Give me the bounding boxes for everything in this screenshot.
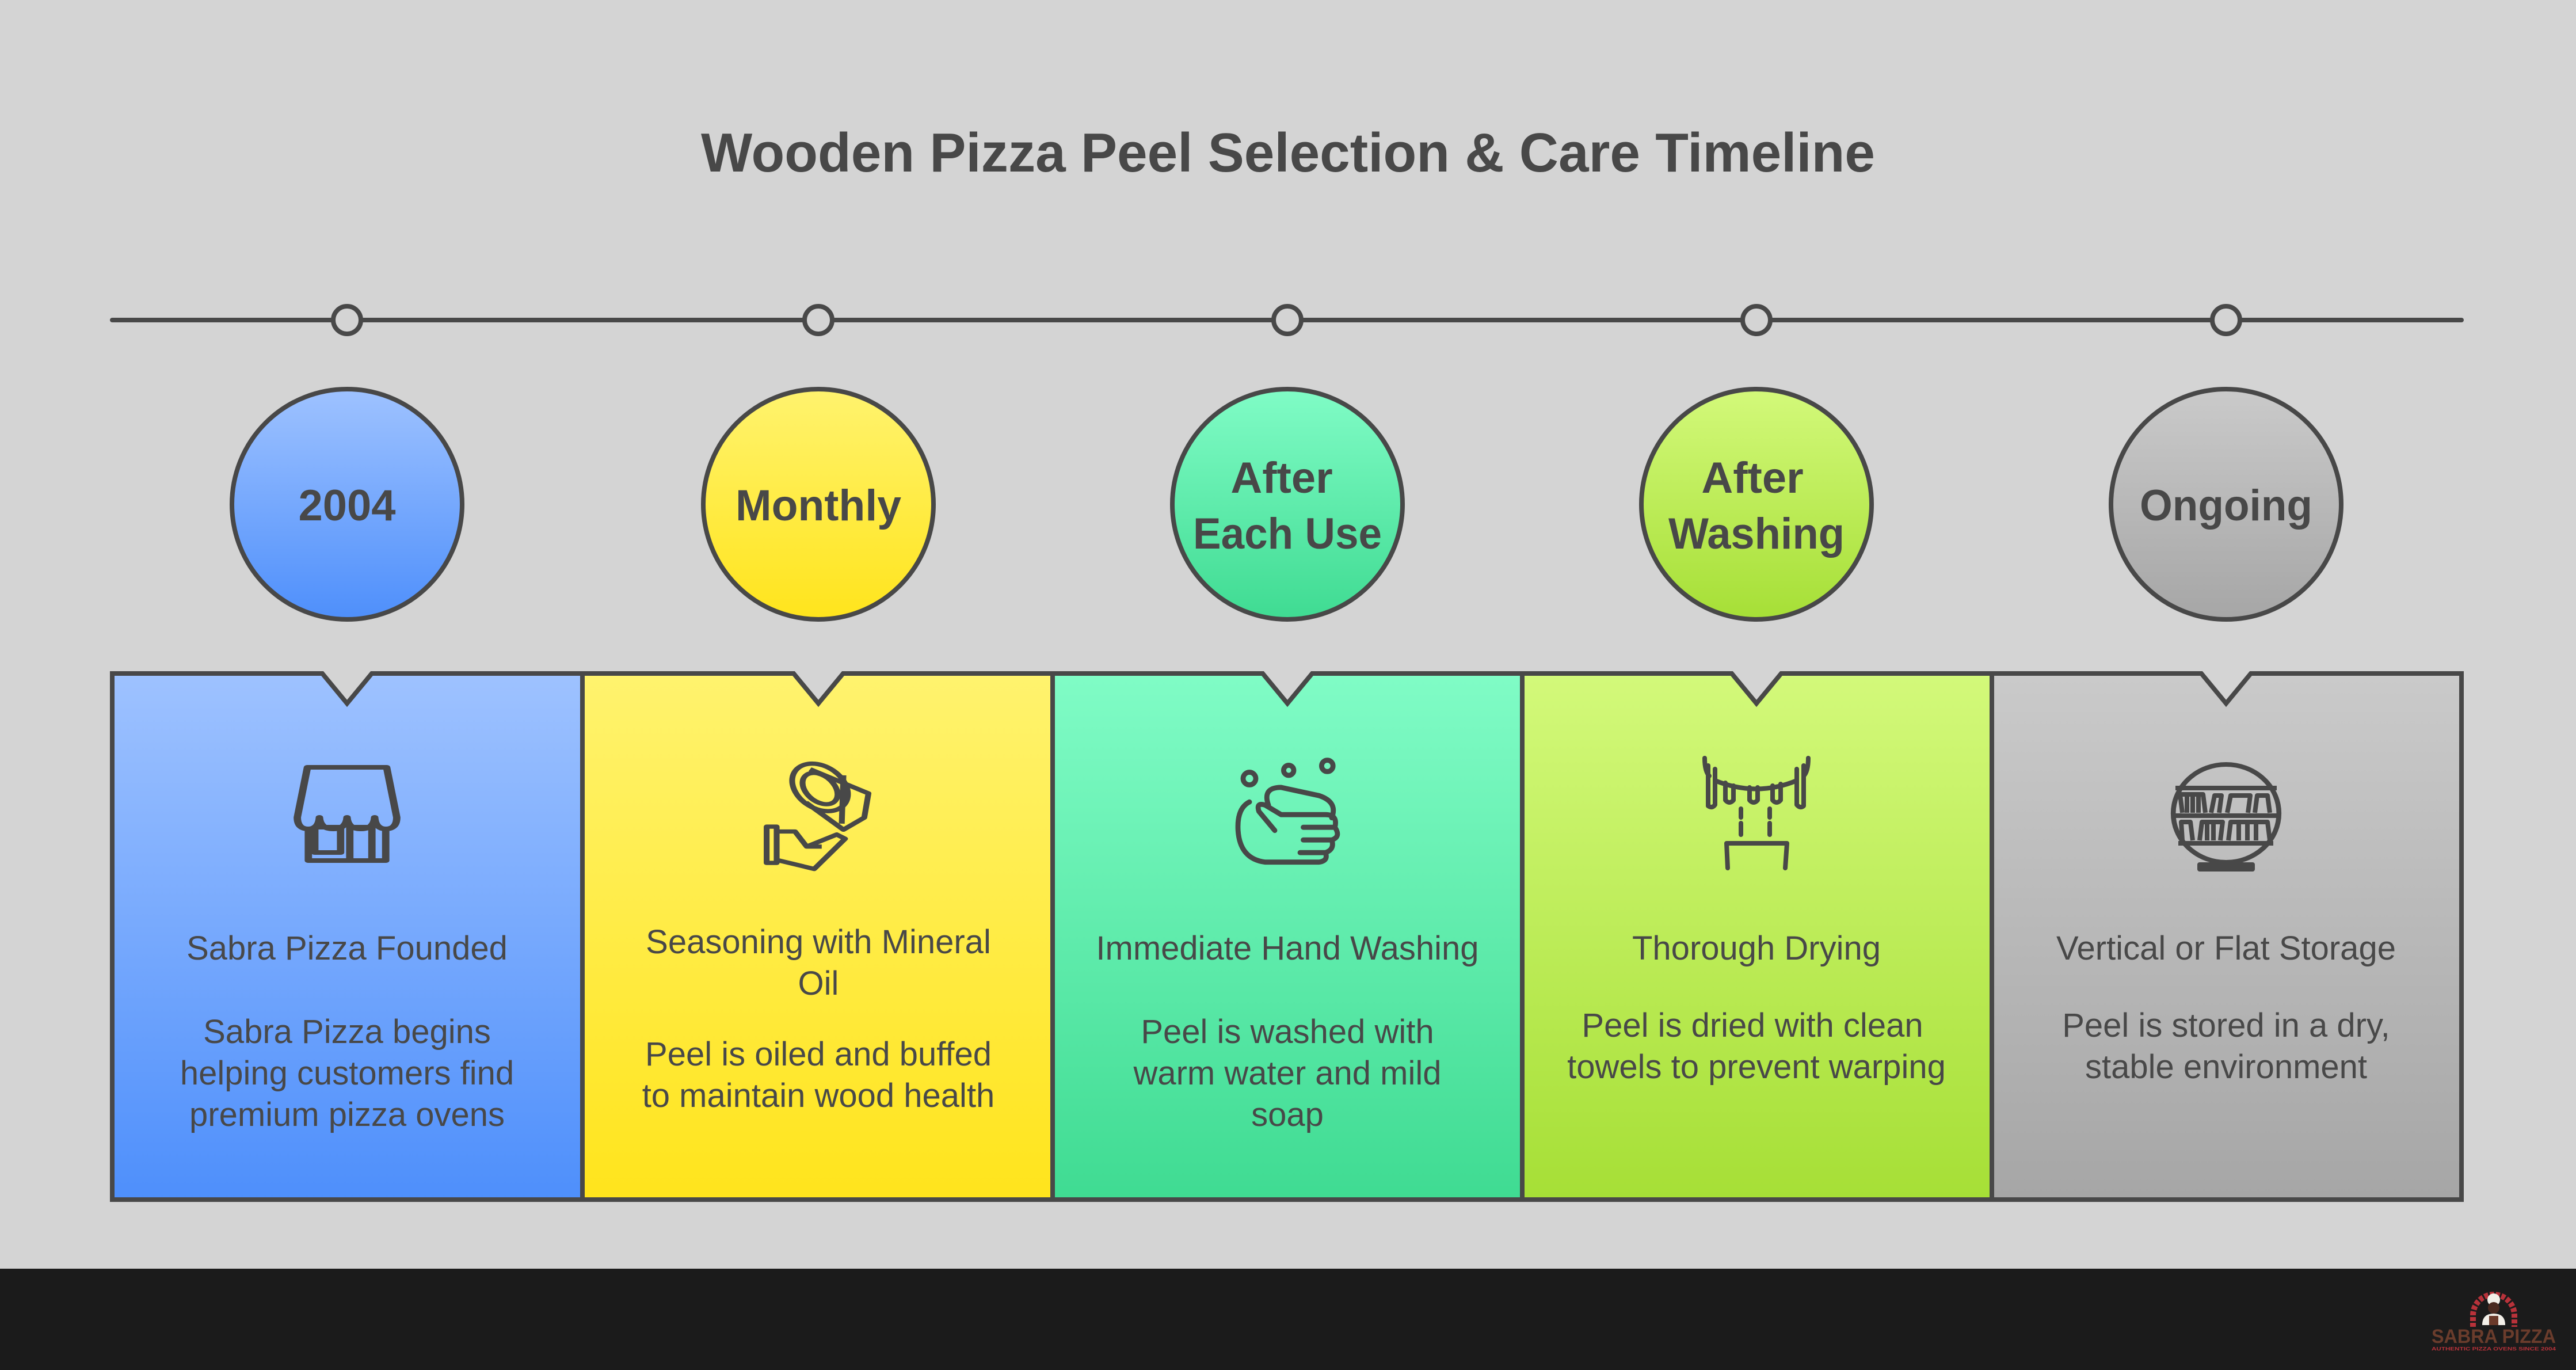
panel: Thorough Drying bbox=[1522, 673, 1992, 1200]
panel: Seasoning with Mineral Oil: Seasoning with Mineral bbox=[646, 923, 991, 961]
circle: Monthly: Monthly bbox=[736, 481, 901, 530]
panel: Vertical or Flat Storage bbox=[1992, 673, 2461, 1200]
circle: Ongoing bbox=[2111, 389, 2341, 619]
circle: After Washing bbox=[1641, 389, 1872, 619]
title: Wooden Pizza Peel Selection & Care Timeline bbox=[701, 122, 1875, 184]
panel: Thorough Drying: towels to prevent warping bbox=[1567, 1048, 1946, 1086]
panel: Seasoning with Mineral Oil: to maintain wood health bbox=[642, 1077, 994, 1114]
panel: Thorough Drying: Thorough Drying bbox=[1632, 930, 1881, 967]
panel: Seasoning with Mineral Oil bbox=[582, 673, 1053, 1200]
logo: Sabra Pizza: AUTHENTIC PIZZA OVENS SINCE 2004 bbox=[2432, 1346, 2556, 1352]
footer bar bbox=[0, 1269, 2576, 1370]
circle: After Each Use: Each Use bbox=[1193, 509, 1382, 558]
circle: Ongoing: Ongoing bbox=[2140, 481, 2312, 530]
panel: Sabra Pizza Founded: premium pizza ovens bbox=[189, 1096, 505, 1133]
panel: Immediate Hand Washing bbox=[1053, 673, 1522, 1200]
panel: Sabra Pizza Founded: helping customers find bbox=[180, 1055, 514, 1092]
circle: 2004: 2004 bbox=[298, 481, 396, 530]
icon: storefront bbox=[298, 767, 397, 861]
panel: Immediate Hand Washing: Immediate Hand Washing bbox=[1096, 930, 1479, 967]
marker 4 bbox=[1743, 306, 1770, 334]
icon: storage shelf bbox=[2173, 764, 2279, 869]
panel: Sabra Pizza Founded bbox=[112, 673, 582, 1200]
circle: After Each Use bbox=[1172, 389, 1403, 619]
panel: Vertical or Flat Storage: Peel is stored in a dry, bbox=[2062, 1007, 2390, 1044]
panel: Immediate Hand Washing: soap bbox=[1251, 1096, 1324, 1133]
panel: Thorough Drying: Peel is dried with clean bbox=[1582, 1007, 1923, 1044]
timeline line bbox=[112, 306, 2461, 334]
panel: Vertical or Flat Storage: Vertical or Flat Storage bbox=[2056, 930, 2396, 967]
icon: drying towel bbox=[1705, 758, 1808, 868]
icon: washing hands bbox=[1238, 760, 1337, 862]
panel: Immediate Hand Washing: warm water and mild bbox=[1133, 1055, 1442, 1092]
circle: After Washing: After bbox=[1701, 454, 1804, 503]
logo: Sabra Pizza: SABRA PIZZA bbox=[2432, 1326, 2556, 1348]
circle: 2004 bbox=[232, 389, 462, 619]
panel: Immediate Hand Washing: Peel is washed with bbox=[1141, 1013, 1434, 1051]
marker 2 bbox=[805, 306, 832, 334]
circle: After Washing: Washing bbox=[1668, 509, 1845, 558]
panel: Vertical or Flat Storage: stable environment bbox=[2085, 1048, 2367, 1086]
panel: Seasoning with Mineral Oil: Peel is oiled and buffed bbox=[645, 1036, 992, 1073]
circle: Monthly bbox=[703, 389, 933, 619]
marker 5 bbox=[2212, 306, 2240, 334]
icon: oil bottle in hand bbox=[767, 756, 868, 869]
marker 1 bbox=[333, 306, 361, 334]
panel: Sabra Pizza Founded: Sabra Pizza begins bbox=[203, 1013, 491, 1051]
circle: After Each Use: After bbox=[1230, 454, 1333, 503]
panel: Sabra Pizza Founded: Sabra Pizza Founded bbox=[186, 930, 508, 967]
marker 3 bbox=[1274, 306, 1301, 334]
logo: Sabra Pizza bbox=[2432, 1293, 2556, 1352]
panel: Seasoning with Mineral Oil: Oil bbox=[798, 965, 839, 1002]
